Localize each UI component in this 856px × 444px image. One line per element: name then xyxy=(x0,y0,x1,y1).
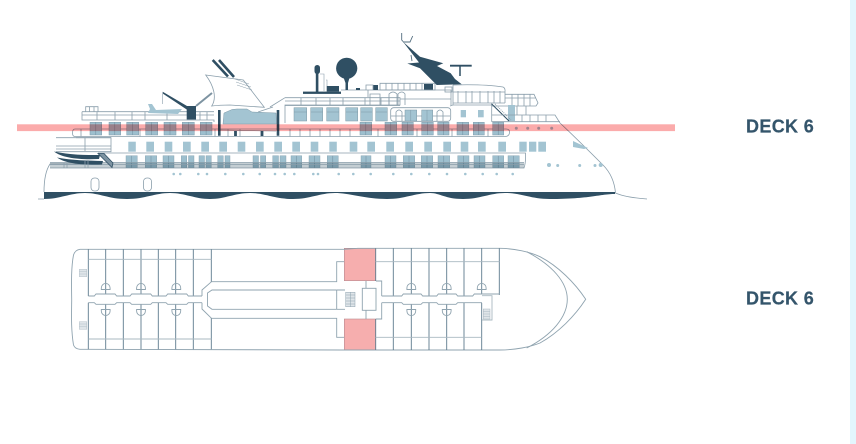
deck 5 promenade rail xyxy=(72,129,510,138)
central lounge walls xyxy=(202,262,344,337)
deck 6 floor plan xyxy=(72,248,586,350)
deck level highlight band xyxy=(17,124,675,131)
hull outline xyxy=(72,248,586,350)
highlighted zones xyxy=(344,248,376,350)
hull xyxy=(38,123,647,199)
inner bow line xyxy=(527,252,567,348)
deck 3 windows xyxy=(126,156,519,168)
right edge strip xyxy=(850,0,856,444)
funnel xyxy=(206,60,264,107)
bow dots xyxy=(515,127,553,130)
aft cabins xyxy=(88,249,211,349)
tender boats and stair xyxy=(54,138,113,168)
crane xyxy=(163,92,212,120)
waterline waves xyxy=(44,192,615,199)
hull ovals xyxy=(91,178,152,191)
deck 6 window dividers xyxy=(96,122,498,135)
forward service stair xyxy=(482,296,492,320)
forward cabins xyxy=(376,248,499,350)
forward door swings xyxy=(407,283,486,316)
deck 3 rail band xyxy=(50,162,524,168)
aft upper deck rail xyxy=(82,107,214,122)
deck 6 label, elevation: DECK 6 xyxy=(746,116,814,136)
radome xyxy=(336,58,357,90)
main mast xyxy=(402,33,472,85)
central stair core xyxy=(337,281,382,319)
aft door swings xyxy=(101,283,181,316)
aft stairs xyxy=(79,269,87,329)
deck 6 label, plan: DECK 6 xyxy=(746,288,814,308)
deck 3 window dividers xyxy=(132,156,514,168)
aft launch boat xyxy=(148,104,182,114)
ship side elevation xyxy=(38,33,647,199)
deck 4 windows xyxy=(128,142,546,152)
top deck equipment xyxy=(303,65,435,94)
superstructure xyxy=(270,90,451,123)
portholes xyxy=(172,141,603,175)
deck 6 windows xyxy=(90,122,504,135)
lifeboat xyxy=(219,107,278,136)
bridge xyxy=(445,85,560,123)
